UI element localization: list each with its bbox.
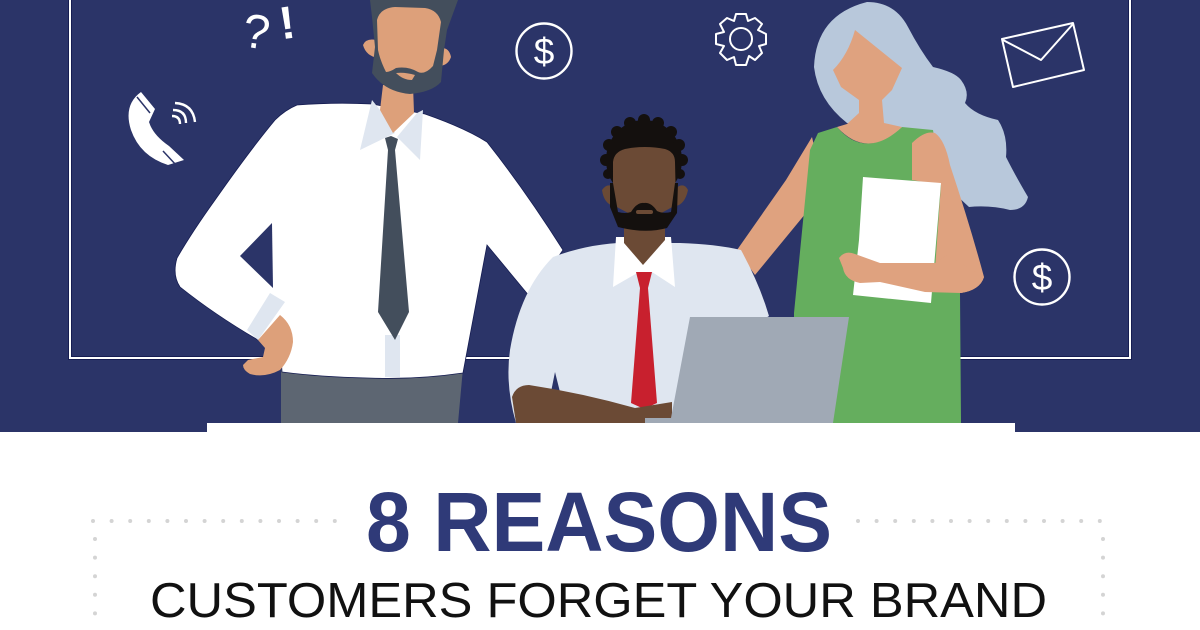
figure: woman with document xyxy=(737,2,1028,423)
woman forearm and hand xyxy=(839,253,984,293)
icon: dollar coin top: $ xyxy=(534,31,554,72)
white frame xyxy=(70,0,1130,358)
man tie xyxy=(378,136,409,340)
woman document xyxy=(853,177,941,303)
laptop xyxy=(645,317,849,423)
seated man collar xyxy=(613,237,675,287)
man shirt xyxy=(175,103,563,378)
seated man shirt xyxy=(508,243,769,423)
seated man hair xyxy=(600,114,688,200)
man face xyxy=(377,7,441,73)
dotted frame xyxy=(93,521,1105,630)
man hair and beard xyxy=(370,0,458,94)
seated man forearm xyxy=(512,385,672,423)
seated man neck xyxy=(624,215,665,265)
seated man ears xyxy=(602,185,688,206)
title: 8 REASONS: 8 REASONS xyxy=(366,475,832,569)
seated man beard xyxy=(610,183,678,231)
seated man shirt fold xyxy=(551,372,560,392)
man arm gap xyxy=(240,223,273,288)
figure: seated man xyxy=(508,114,849,423)
icon: telephone with signal waves xyxy=(129,92,195,165)
woman face and neck xyxy=(833,30,902,144)
woman hair xyxy=(814,2,1028,210)
man trousers xyxy=(281,368,463,423)
man shirt placket xyxy=(385,335,400,377)
icon: dollar coin right: $ xyxy=(1032,257,1052,298)
icon: dollar coin top xyxy=(516,24,572,78)
man cuff xyxy=(247,293,285,340)
icon: dollar coin right xyxy=(1014,250,1070,304)
subtitle: customers forget your brand: CUSTOMERS FORGET YOUR BRAND xyxy=(150,574,1047,628)
woman far arm xyxy=(737,137,815,275)
icon: question and exclamation marks xyxy=(239,0,298,61)
seated man face xyxy=(613,147,676,222)
white title panel xyxy=(0,423,1200,630)
man hand xyxy=(243,315,293,375)
icon: envelope xyxy=(1002,23,1084,87)
figure: standing man xyxy=(175,0,563,423)
seated man red tie xyxy=(631,272,657,409)
navy background panel xyxy=(0,0,1200,432)
woman dress xyxy=(794,127,961,423)
icon: gear xyxy=(716,14,766,65)
man collar xyxy=(360,100,423,160)
icon: question and exclamation marks: ? xyxy=(239,5,273,61)
seated man mouth xyxy=(636,210,653,214)
man neck and ears xyxy=(363,40,451,133)
woman upper arm xyxy=(912,132,984,293)
man mouth xyxy=(396,73,415,80)
